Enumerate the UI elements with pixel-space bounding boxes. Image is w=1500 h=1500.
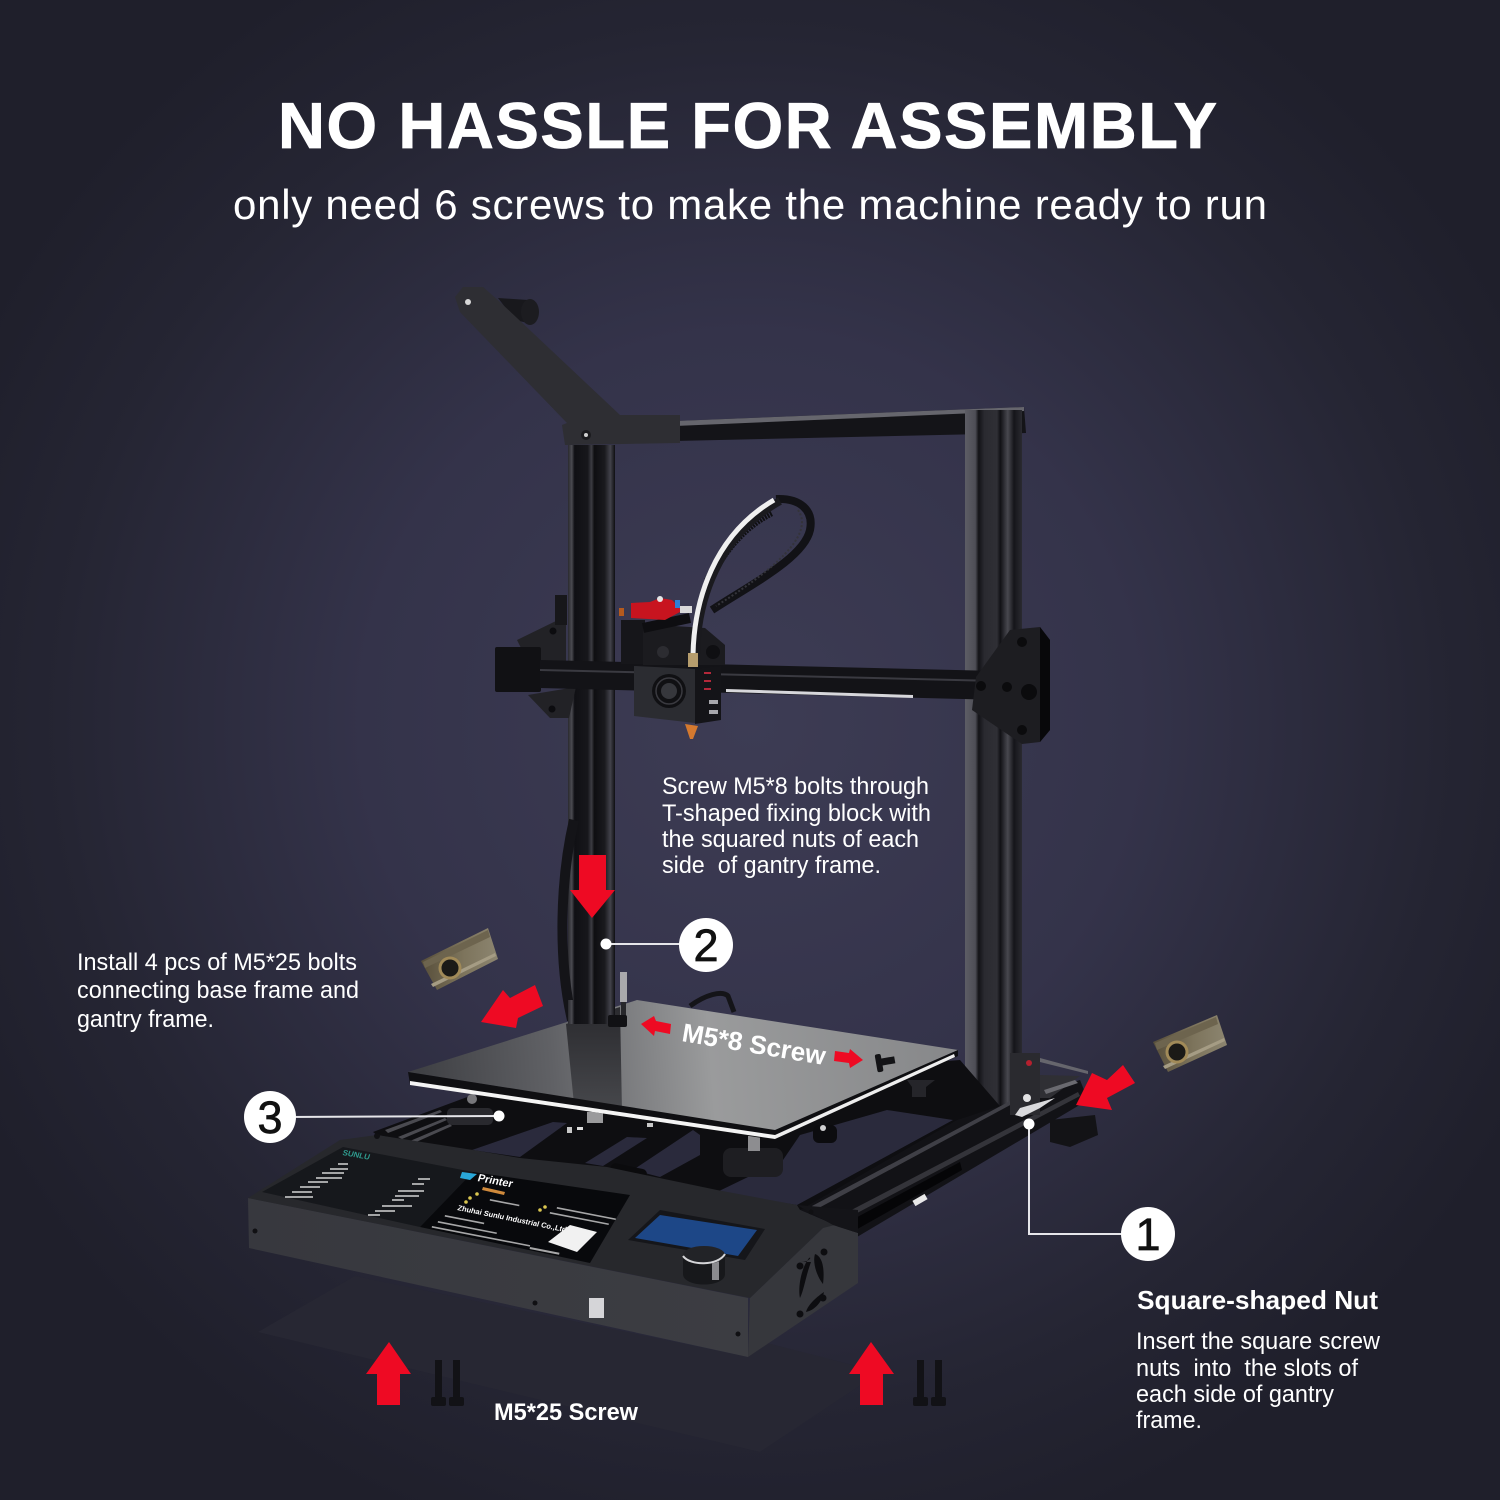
spool holder arm <box>455 287 680 445</box>
red arrow: up right <box>849 1342 894 1405</box>
label list lines <box>285 1163 430 1216</box>
left motor and plates <box>517 620 566 662</box>
heading: Square-shaped Nut: Square-shaped Nut <box>1137 1285 1378 1315</box>
bed knobs <box>447 1108 493 1125</box>
red extruder lever <box>619 596 692 620</box>
text: base instructions: gantry frame. <box>77 1006 214 1033</box>
base box <box>248 1133 858 1357</box>
rail openings <box>472 1110 953 1205</box>
text: gantry instructions: the squared nuts of each <box>662 826 919 853</box>
extruder gear belt <box>643 618 690 628</box>
orange warning bar <box>482 1187 505 1195</box>
callout 1: 1 <box>1135 1209 1161 1260</box>
M5*25 screws left <box>431 1360 464 1406</box>
right plate <box>972 627 1050 744</box>
rear bracket <box>1010 1053 1088 1117</box>
red arrow: small right <box>834 1049 863 1068</box>
text: base instructions: Install 4 pcs of M5*25 bolts <box>77 949 357 976</box>
red arrow: right diagonal <box>1076 1065 1135 1110</box>
left upright foreground <box>568 1000 615 1024</box>
left upright <box>568 445 615 1025</box>
filament tube <box>696 501 780 655</box>
square nut left <box>421 928 498 990</box>
label: M5*8 Screw: M5*8 Screw <box>680 1017 829 1071</box>
Y rail <box>800 1080 1088 1237</box>
text: base instructions: connecting base frame and <box>77 977 359 1004</box>
M5*25 screws right <box>913 1360 946 1406</box>
subtitle: only need 6 screws to make the machine ready to run <box>233 181 1267 228</box>
text: nut instructions <box>1136 1328 1381 1434</box>
text: gantry instructions: side of gantry frame. <box>662 852 881 879</box>
red arrow: down to gantry <box>570 855 615 918</box>
warning dots <box>464 1192 547 1212</box>
company name: Zhuhai Sunlu Industrial Co.,Ltd <box>456 1203 568 1234</box>
label panel left <box>262 1147 473 1227</box>
callout 1 <box>1024 1118 1175 1261</box>
text: nut instructions: nuts into the slots of <box>1136 1355 1358 1382</box>
screw on bed <box>875 1051 896 1072</box>
text: nut instructions: frame. <box>1136 1407 1202 1434</box>
label panel right <box>420 1172 630 1263</box>
upright reflection <box>566 1007 622 1112</box>
text: base instructions <box>77 949 359 1033</box>
top frame bar <box>675 407 1026 441</box>
base logo badge <box>589 1298 604 1318</box>
bed edge <box>408 1050 958 1140</box>
X gantry <box>495 595 1050 744</box>
text: nut instructions: each side of gantry <box>1136 1381 1334 1408</box>
hotend shroud <box>634 666 695 723</box>
square nut right <box>1153 1015 1227 1072</box>
text: nut instructions: Insert the square screw <box>1136 1328 1381 1355</box>
text: gantry instructions: T-shaped fixing block with <box>662 800 931 827</box>
LCD screen <box>635 1215 757 1256</box>
rear motor <box>1050 1115 1098 1147</box>
red arrow: up left <box>366 1342 411 1405</box>
extruder carriage <box>619 499 811 739</box>
spool holder post <box>498 298 539 325</box>
red arrow: left diagonal <box>481 985 543 1028</box>
side fan <box>796 1248 828 1318</box>
left rail slots <box>385 1110 452 1143</box>
base side face <box>748 1225 858 1357</box>
print bed <box>408 1000 958 1140</box>
QR code <box>548 1225 597 1252</box>
fan <box>652 674 686 708</box>
3D printer illustration <box>248 287 1098 1357</box>
bed frame rails <box>373 1053 1098 1237</box>
gantry beam <box>540 660 1040 701</box>
base front face <box>248 1198 748 1357</box>
floor shadow <box>258 1276 880 1452</box>
text: gantry instructions: Screw M5*8 bolts through <box>662 773 929 800</box>
red arrow: small left <box>641 1016 671 1036</box>
callout 2 <box>600 918 733 972</box>
bed cable <box>690 993 734 1012</box>
brand mark: SUNLU <box>341 1148 371 1162</box>
control knob <box>683 1246 725 1284</box>
LCD bezel <box>628 1210 765 1260</box>
cable behind upright <box>562 820 574 1020</box>
label: M5*25 Screw: M5*25 Screw <box>494 1399 638 1426</box>
callout 3: 3 <box>257 1092 283 1143</box>
base screws <box>252 1133 814 1336</box>
right upright <box>965 410 1022 1125</box>
base top surface <box>248 1135 835 1298</box>
callout 2: 2 <box>693 920 719 971</box>
title: NO HASSLE FOR ASSEMBLY <box>278 89 1217 162</box>
callout 3 <box>244 1091 504 1143</box>
cable tie loop <box>712 499 811 610</box>
belt rod <box>726 689 913 698</box>
printer logo <box>460 1172 477 1180</box>
base box: Printer <box>476 1172 515 1190</box>
nozzle <box>685 724 698 739</box>
address lines <box>432 1199 616 1255</box>
text: gantry instructions <box>662 773 931 879</box>
tube fitting <box>688 653 698 667</box>
bed screw parts <box>620 972 627 1002</box>
